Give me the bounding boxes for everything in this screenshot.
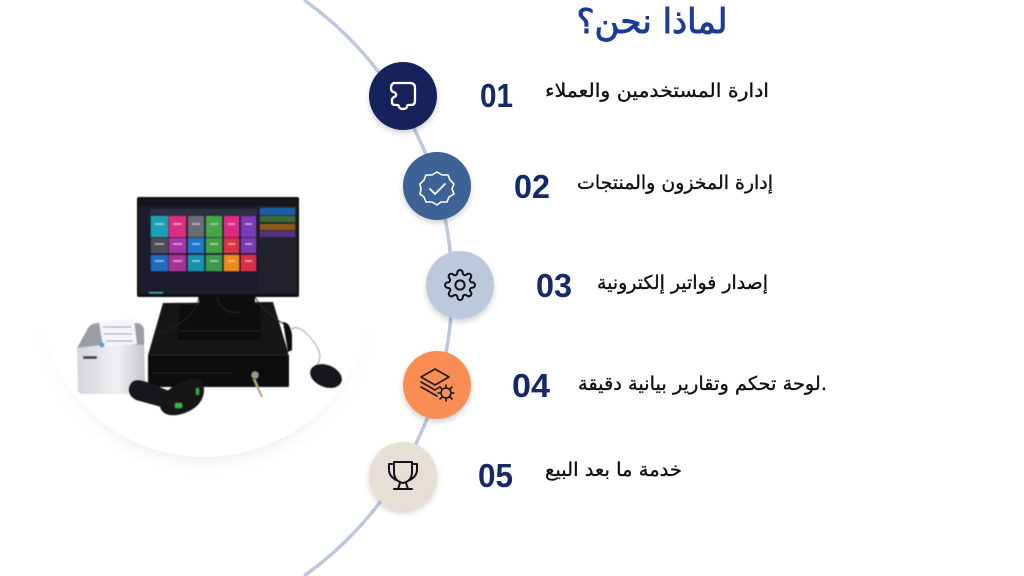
step 04	[403, 351, 827, 419]
step 03	[426, 251, 768, 319]
number 03: 03	[536, 268, 572, 305]
product photo: POS system	[77, 197, 345, 415]
receipt printer	[77, 319, 145, 394]
number 02: 02	[514, 169, 550, 206]
monitor stand	[160, 296, 285, 340]
cash drawer	[148, 302, 292, 397]
timeline arc	[304, 0, 452, 576]
step 02	[403, 152, 773, 220]
step 01	[369, 62, 769, 130]
text 03: إصدار فواتير إلكترونية	[597, 272, 768, 295]
mouse	[291, 328, 345, 392]
icon: layers with gear	[403, 351, 471, 419]
text 04: لوحة تحكم وتقارير بيانية دقيقة.	[578, 373, 827, 395]
number 05: 05	[478, 458, 513, 495]
number 04: 04	[512, 368, 550, 405]
title: لماذا نحن؟	[576, 2, 728, 42]
icon: trophy	[369, 442, 437, 510]
text 02: إدارة المخزون والمنتجات	[577, 172, 773, 195]
icon: badge check	[403, 152, 471, 220]
monitor	[137, 197, 299, 297]
number 01: 01	[480, 78, 513, 115]
text 05: خدمة ما بعد البيع	[545, 459, 682, 481]
barcode scanner	[129, 378, 204, 415]
icon: gear	[426, 251, 494, 319]
background white circle	[80, 401, 331, 462]
icon: puzzle piece	[369, 62, 437, 130]
step 05	[369, 442, 682, 510]
text 01: ادارة المستخدمين والعملاء	[545, 80, 769, 102]
